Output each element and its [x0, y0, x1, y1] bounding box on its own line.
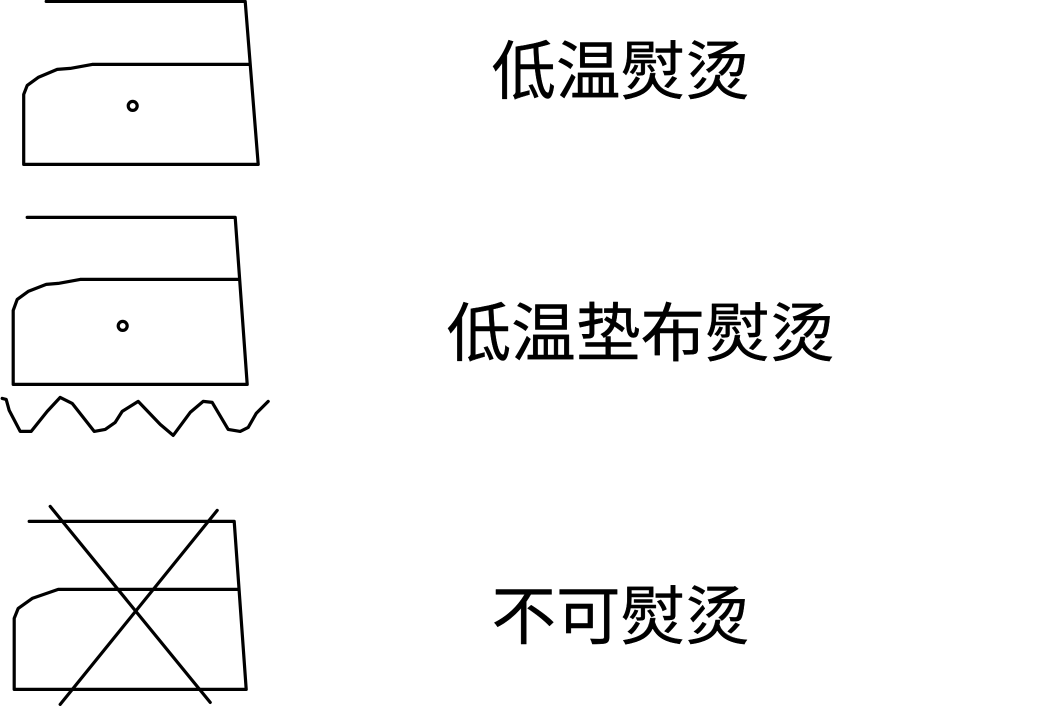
- icon: low temperature iron with cloth: [2, 217, 268, 435]
- icon: do not iron: [14, 506, 246, 704]
- label: do not iron: 不可熨烫: [492, 581, 750, 653]
- label: low temperature ironing: 低温熨烫: [492, 36, 750, 108]
- icon: low temperature iron: [24, 1, 258, 164]
- label: low temperature ironing with cloth: 低温垫布熨烫: [446, 298, 834, 370]
